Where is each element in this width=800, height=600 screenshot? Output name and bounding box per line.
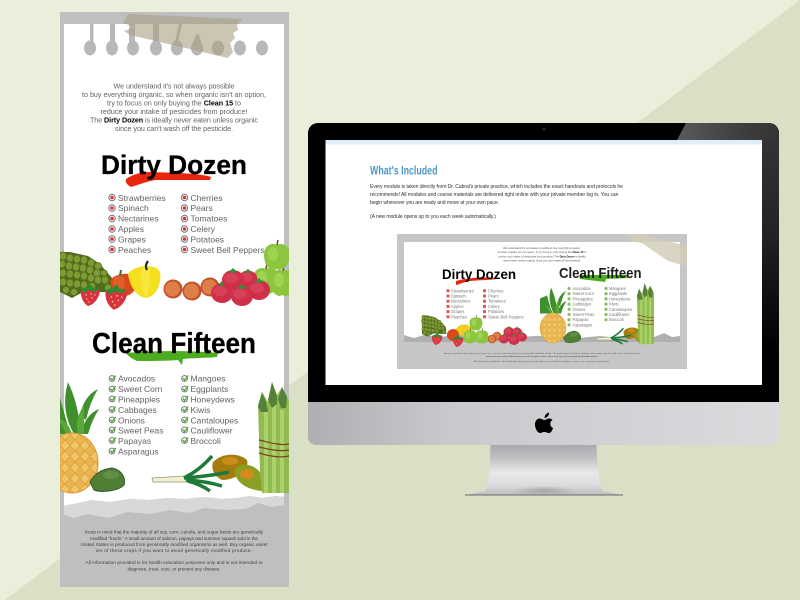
thumbnail list: Clean Fifteen: Kiwis <box>609 302 619 307</box>
list: Clean Fifteen items: Avocados <box>118 374 155 384</box>
list: Clean Fifteen items: Sweet Peas <box>118 426 163 436</box>
list: Dirty Dozen items: Cherries <box>190 193 223 203</box>
thumbnail list: Dirty Dozen: Celery <box>488 304 501 309</box>
thumbnail brush strokes <box>456 277 498 285</box>
list: Clean Fifteen items: Pineapples <box>118 394 160 404</box>
list: Clean Fifteen items: Sweet Corn <box>118 384 163 394</box>
thumbnail list: Clean Fifteen: Cantaloupes <box>609 307 632 312</box>
intro text: to buy everything organic, so when organic isn't an option, <box>82 90 266 99</box>
thumbnail list: Clean Fifteen: Sweet Corn <box>572 291 595 296</box>
monitor stand <box>465 445 623 496</box>
list: Clean Fifteen items: Broccoli <box>190 436 221 446</box>
green brush stroke <box>126 351 218 365</box>
thumbnail footer text: produced from genetically modified organisms as well. Buy organic varieties of these crops if you want to avoid genetically modified produce. <box>486 355 598 358</box>
heading: Dirty Dozen: Dirty Dozen <box>101 150 247 180</box>
footer disclaimer text <box>80 530 268 571</box>
thumbnail list: Clean Fifteen: Papayas <box>572 317 588 322</box>
red brush stroke <box>126 172 211 187</box>
list: Clean Fifteen items: Asparagus <box>118 446 159 456</box>
torn paper edge <box>64 496 284 518</box>
screen top strip <box>326 140 762 144</box>
thumbnail tape <box>628 234 687 266</box>
thumbnail list: Dirty Dozen: Peaches <box>451 314 467 319</box>
thumbnail list: Dirty Dozen: Sweet Bell Peppers <box>488 314 524 319</box>
thumbnail footer text: Keep in mind that the majority of all soy, corn, canola, and sugar beets are genetically modified "foods." A small amount of salmon, papaya and summer squash sold in the United States is <box>444 352 640 355</box>
tape <box>123 14 243 58</box>
thumbnail heading: Clean Fifteen: Clean Fifteen <box>559 265 642 282</box>
intro text: reduce your intake of pesticides from produce! <box>100 107 248 116</box>
thumbnail list: Clean Fifteen: Mangoes <box>609 286 626 291</box>
thumbnail paper <box>404 242 680 338</box>
list: Clean Fifteen items: Cantaloupes <box>190 415 238 425</box>
screen <box>326 140 762 385</box>
list: Clean Fifteen items: Papayas <box>118 436 151 446</box>
list: Dirty Dozen items: Potatoes <box>190 234 224 244</box>
paper sheet <box>64 24 284 506</box>
illustration: dirty dozen produce <box>58 240 296 310</box>
heading: What's Included: What's Included <box>370 164 438 178</box>
bezel gloss <box>677 123 779 402</box>
thumbnail list: Clean Fifteen: Cabbages <box>572 302 591 307</box>
heading: Clean Fifteen: Clean Fifteen <box>92 328 256 360</box>
list: Dirty Dozen items: Strawberries <box>118 193 166 203</box>
thumbnail list: Clean Fifteen: Cauliflower <box>609 312 630 317</box>
thumbnail list: Clean Fifteen: Asparagus <box>572 322 592 327</box>
list: Clean Fifteen items: Eggplants <box>190 384 228 394</box>
thumbnail list: Dirty Dozen <box>446 288 524 319</box>
list: Clean Fifteen items: Mangoes <box>190 374 225 384</box>
thumbnail list: Dirty Dozen: Spinach <box>451 294 467 298</box>
footer disclaimer text: Keep in mind that the majority of all soy, corn, canola, and sugar beets are genetically <box>85 530 264 534</box>
thumbnail list: Clean Fifteen: Eggplants <box>609 291 627 296</box>
icon: apple logo <box>535 412 553 433</box>
thumbnail list: Dirty Dozen: Potatoes <box>488 309 504 314</box>
screen body text: (A new module opens up to you each week automatically.) <box>370 214 496 220</box>
footer disclaimer text: ies of these crops if you want to avoid genetically modified produce. <box>96 548 252 553</box>
panel: Dirty Dozen and Clean Fifteen poster <box>46 12 296 587</box>
list: Clean Fifteen items: Cabbages <box>118 405 157 415</box>
thumbnail list: Dirty Dozen: Nectarines <box>451 299 471 304</box>
thumbnail list: Dirty Dozen: Apples <box>451 304 464 309</box>
list: Clean Fifteen items: Onions <box>118 415 145 425</box>
thumbnail list: Clean Fifteen: Pineapples <box>572 296 593 301</box>
list: Dirty Dozen items: Celery <box>190 224 216 234</box>
thumbnail intro text: so when organic isn't an option, try to focus on only buying the Clean 15 to <box>498 250 587 254</box>
screen body text <box>370 184 623 220</box>
intro text: try to focus on only buying the Clean 15 to <box>107 98 241 108</box>
thumbnail illustration: clean fifteen produce <box>540 283 654 344</box>
intro text: The Dirty Dozen is ideally never eaten unless organic <box>90 116 258 124</box>
screen body text: begin whenever you are ready and move at your own pace. <box>370 200 499 206</box>
thumbnail list: Clean Fifteen: Onions <box>572 307 585 312</box>
thumbnail paper shadow <box>404 333 680 342</box>
illustration: clean fifteen produce <box>46 382 289 493</box>
monitor chin <box>308 400 779 445</box>
list: Clean Fifteen items: Honeydews <box>190 394 235 404</box>
intro text: since you can't wash off the pesticide. <box>115 124 233 133</box>
thumbnail list: Clean Fifteen: Broccoli <box>609 317 624 322</box>
camera <box>543 128 545 130</box>
footer disclaimer text: All information provided is for health education purposes only and is not intended to <box>86 560 263 565</box>
thumbnail intro text <box>498 247 586 262</box>
thumbnail intro text: never eaten unless organic since you can't wash off the pesticide. <box>503 259 581 263</box>
screen body text: Every module is taken directly from Dr. Cabral's private practice, which includes the exact handouts and protocols he <box>370 184 623 190</box>
footer disclaimer text: United States is produced from genetically modified organisms as well. Buy organic variet <box>80 542 268 547</box>
notebook holes and binding <box>84 24 268 56</box>
thumbnail list: Dirty Dozen: Strawberries <box>451 288 474 293</box>
thumbnail intro text: We understand it's not always possible to buy everything organic, <box>503 246 581 250</box>
monitor <box>308 123 779 496</box>
intro text <box>82 82 266 133</box>
monitor bezel <box>308 123 779 402</box>
footer disclaimer text: modified "foods." A small amount of salmon, papaya and summer squash sold in the <box>90 536 258 541</box>
list: Dirty Dozen items: Apples <box>118 224 144 234</box>
thumbnail list: Dirty Dozen: Cherries <box>488 288 503 293</box>
list: Dirty Dozen items: Sweet Bell Peppers <box>190 245 265 255</box>
thumbnail list: Dirty Dozen: Pears <box>488 294 499 298</box>
list: Clean Fifteen items <box>109 374 238 456</box>
list: Dirty Dozen items: Spinach <box>118 203 149 213</box>
thumbnail heading: Dirty Dozen: Dirty Dozen <box>442 266 516 282</box>
list: Dirty Dozen items <box>109 193 265 255</box>
screen body text: recommends! All modules and course materials are delivered right online with your private member log in. You can <box>370 192 619 198</box>
list: Dirty Dozen items: Grapes <box>118 234 146 244</box>
screen poster thumbnail <box>397 234 687 369</box>
list: Dirty Dozen items: Tomatoes <box>190 214 227 224</box>
thumbnail list: Dirty Dozen: Tomatoes <box>488 299 506 304</box>
thumbnail intro text: reduce your intake of pesticides from produce! The Dirty Dozen is ideally <box>498 254 586 258</box>
thumbnail list: Clean Fifteen: Honeydews <box>609 296 630 301</box>
list: Clean Fifteen items: Cauliflower <box>190 426 233 436</box>
intro text: We understand it's not always possible <box>114 82 234 90</box>
thumbnail list: Clean Fifteen: Sweet Peas <box>572 312 594 317</box>
footer disclaimer text: diagnose, treat, cure, or prevent any disease. <box>128 566 220 571</box>
list: Dirty Dozen items: Peaches <box>118 245 151 255</box>
thumbnail illustration: dirty dozen produce <box>421 315 527 347</box>
thumbnail list: Clean Fifteen <box>567 286 632 327</box>
thumbnail list: Dirty Dozen: Grapes <box>451 309 464 314</box>
list: Dirty Dozen items: Nectarines <box>118 214 159 224</box>
thumbnail list: Clean Fifteen: Avocados <box>572 286 590 291</box>
list: Clean Fifteen items: Kiwis <box>190 405 210 415</box>
list: Dirty Dozen items: Pears <box>190 203 213 213</box>
thumbnail footer text <box>444 352 640 363</box>
thumbnail footer text: All information provided is for health education purposes only and is not intended to diagnose, treat, cure, or prevent any disease. <box>474 360 610 363</box>
